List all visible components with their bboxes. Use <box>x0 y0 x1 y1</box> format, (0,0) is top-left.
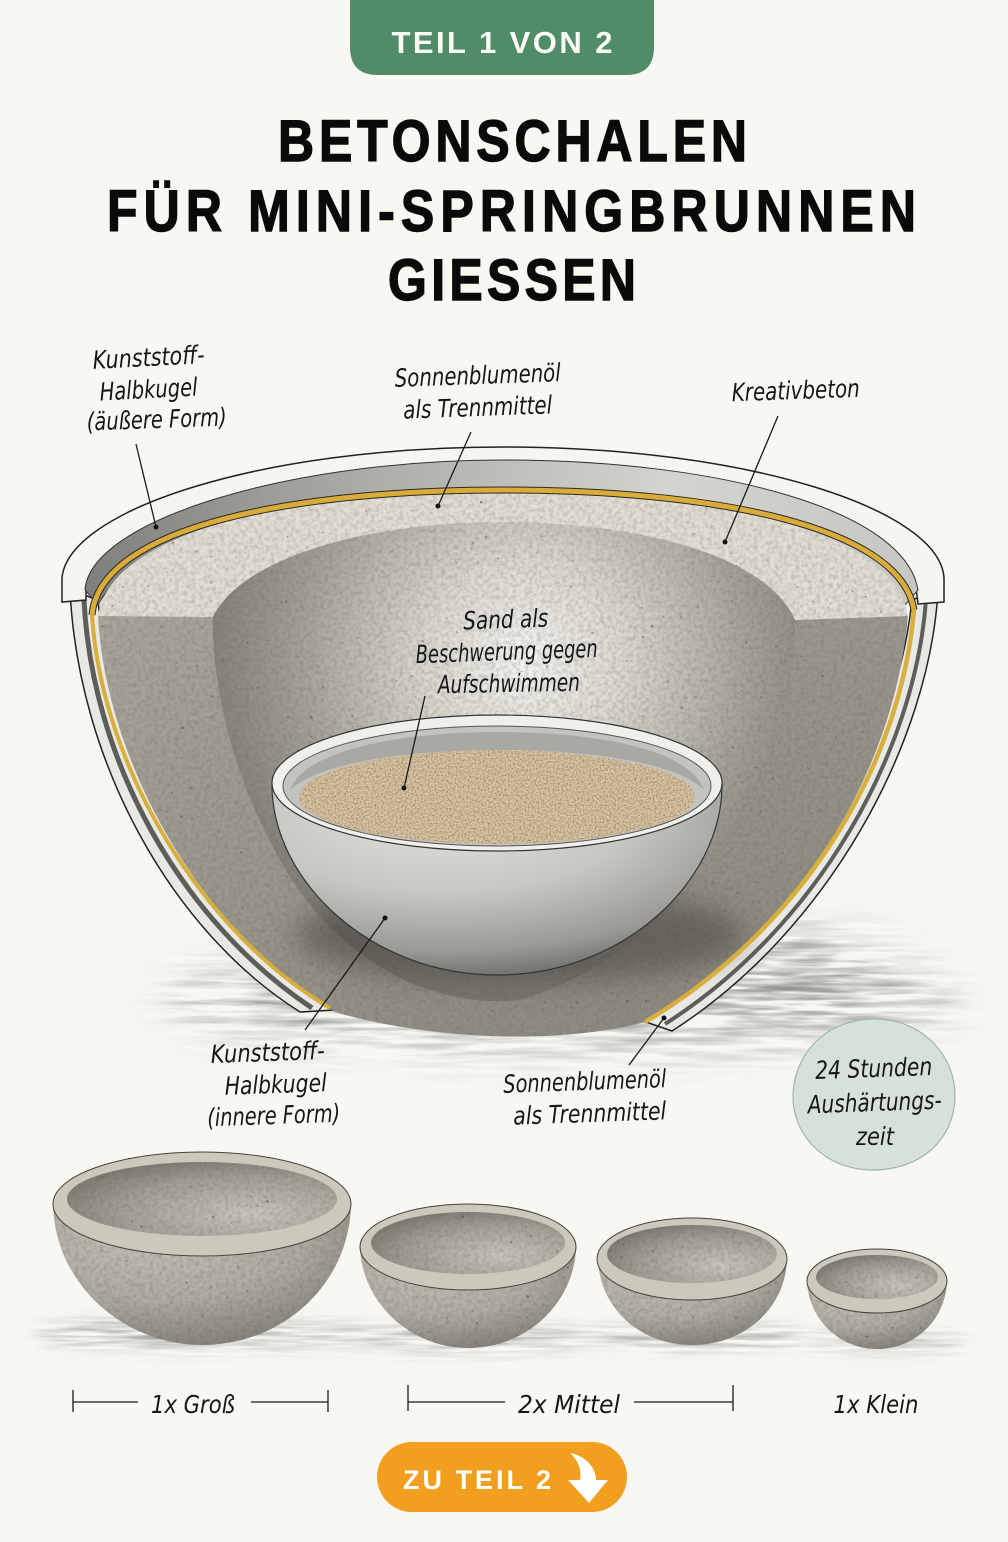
icon: curved arrow <box>568 1453 608 1503</box>
label: outer form: (äußere Form) <box>86 403 227 436</box>
size label: large <box>73 1390 328 1419</box>
ground shadow: small bowls <box>35 1321 965 1350</box>
title: BETONSCHALEN <box>278 110 747 174</box>
badge: curing time: Aushärtungs- <box>806 1086 942 1119</box>
bowl: medium 1 <box>360 1204 576 1348</box>
cavity <box>213 522 795 1001</box>
label: oil bottom: Sonnenblumenöl <box>503 1064 667 1099</box>
outer form wall outside <box>70 590 335 1012</box>
label: outer form: Kunststoff- <box>92 340 205 375</box>
inner bowl body <box>272 785 722 975</box>
label: oil top: Sonnenblumenöl <box>394 358 561 393</box>
label: oil bottom: als Trennmittel <box>513 1096 667 1131</box>
header tab: TEIL 1 VON 2 <box>392 25 612 60</box>
back rim <box>62 447 944 604</box>
label: inner form <box>207 916 388 1132</box>
button: next part <box>377 1442 627 1512</box>
size label: medium: 2x Mittel <box>518 1390 620 1419</box>
label: inner form: Halbkugel <box>224 1068 327 1101</box>
label: concrete <box>722 374 860 544</box>
title: GIESSEN <box>388 249 636 313</box>
ground shadow <box>160 930 960 1050</box>
title <box>107 110 916 313</box>
size label: small: 1x Klein <box>834 1390 918 1419</box>
size label: large: 1x Groß <box>151 1390 235 1419</box>
label: sand: Aufschwimmen <box>436 668 580 699</box>
header tab <box>350 0 654 75</box>
diagram: cross-section bowl <box>62 447 944 1037</box>
shadow under inner bowl <box>295 887 745 983</box>
concrete top surface <box>98 490 908 620</box>
label: concrete: Kreativbeton <box>731 374 860 407</box>
badge: curing time <box>793 1019 955 1170</box>
label: inner form: (innere Form) <box>207 1099 341 1132</box>
bowl: medium 2 <box>597 1218 787 1345</box>
inner bowl rim <box>272 715 722 851</box>
button: next part: ZU TEIL 2 <box>403 1465 551 1495</box>
label: outer form: Halbkugel <box>99 372 198 407</box>
label: sand: Sand als <box>463 604 549 635</box>
badge: curing time: 24 Stunden <box>815 1052 933 1085</box>
label: oil top: als Trennmittel <box>403 390 553 425</box>
concrete section <box>98 615 908 1037</box>
label: oil bottom <box>503 1016 667 1131</box>
bowl: small <box>807 1249 947 1349</box>
label: outer form <box>86 340 227 530</box>
label: sand <box>402 604 598 790</box>
size label: medium <box>408 1385 733 1419</box>
sand <box>299 750 695 844</box>
title: FÜR MINI-SPRINGBRUNNEN <box>107 180 916 244</box>
bowl: large <box>53 1152 351 1345</box>
separator oil layer <box>92 490 914 615</box>
label: sand: Beschwerung gegen <box>415 634 598 669</box>
label: oil top <box>394 358 561 508</box>
badge: curing time: zeit <box>855 1122 895 1151</box>
back wall <box>85 460 918 605</box>
label: inner form: Kunststoff- <box>210 1036 325 1069</box>
